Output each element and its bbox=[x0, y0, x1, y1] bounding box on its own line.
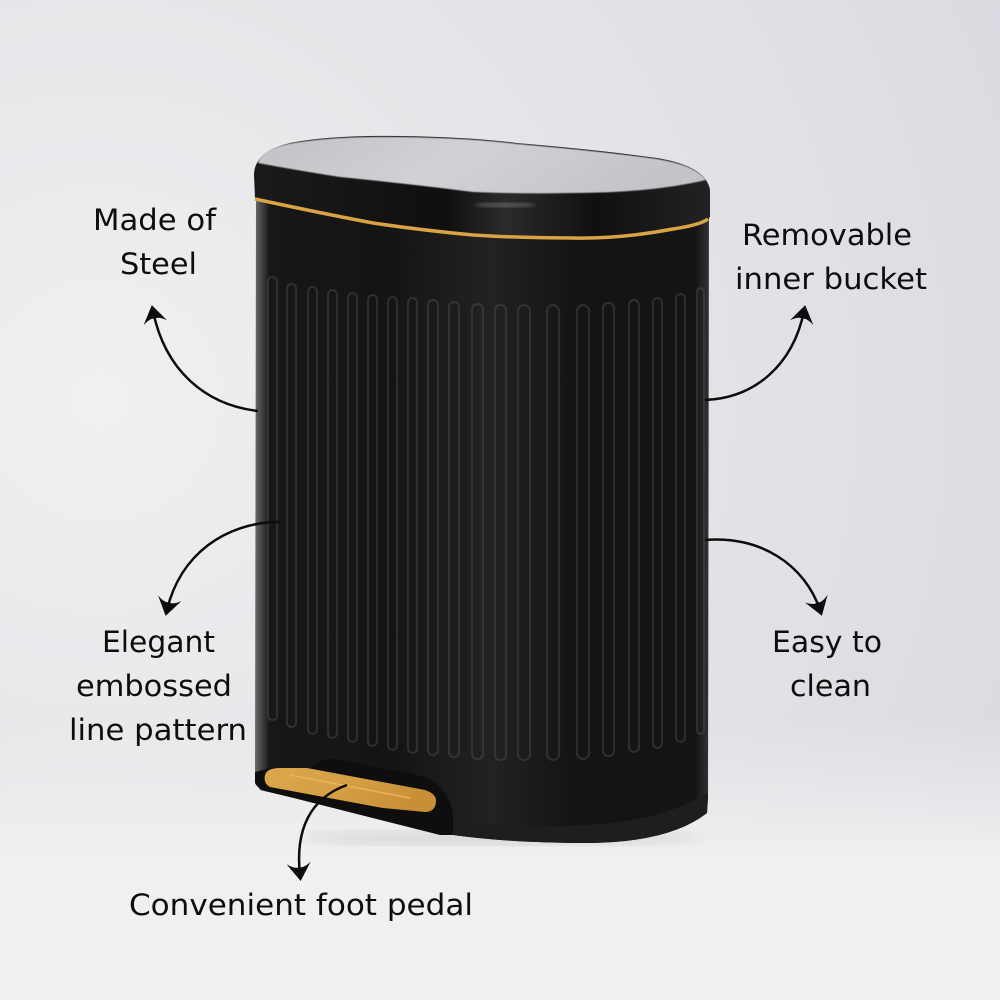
pedal housing bbox=[255, 759, 453, 835]
bin body bbox=[255, 195, 709, 843]
arrow: elegant embossed line pattern bbox=[167, 522, 280, 610]
floor shadow bbox=[300, 831, 700, 845]
label: removable inner bucket bbox=[735, 218, 927, 296]
lid top surface bbox=[258, 137, 706, 193]
label: elegant embossed line pattern bbox=[69, 625, 247, 747]
label: elegant embossed line pattern: Elegant bbox=[102, 625, 215, 659]
label: easy to clean bbox=[772, 625, 882, 703]
arrow: removable inner bucket bbox=[705, 311, 804, 400]
label: made of steel bbox=[93, 203, 217, 281]
gold trim bbox=[255, 199, 708, 238]
label: made of steel: Steel bbox=[120, 247, 197, 281]
label: convenient foot pedal: Convenient foot pedal bbox=[129, 888, 473, 922]
lid highlight bbox=[475, 202, 535, 208]
label: removable inner bucket: inner bucket bbox=[735, 262, 927, 296]
arrow: foot pedal bbox=[299, 785, 347, 875]
arrow: made of steel bbox=[153, 311, 258, 411]
trash bin bbox=[254, 136, 710, 845]
label: easy to clean: clean bbox=[790, 669, 871, 703]
label: elegant embossed line pattern: embossed bbox=[76, 669, 232, 703]
embossed line pattern bbox=[268, 277, 704, 760]
label: removable inner bucket: Removable bbox=[742, 218, 912, 252]
base ring bbox=[453, 792, 708, 843]
label: elegant embossed line pattern: line pattern bbox=[69, 713, 247, 747]
foot pedal bbox=[265, 768, 436, 812]
arrow: easy to clean bbox=[705, 539, 820, 610]
label: easy to clean: Easy to bbox=[772, 625, 882, 659]
lid bbox=[254, 136, 710, 238]
label: made of steel: Made of bbox=[93, 203, 217, 237]
